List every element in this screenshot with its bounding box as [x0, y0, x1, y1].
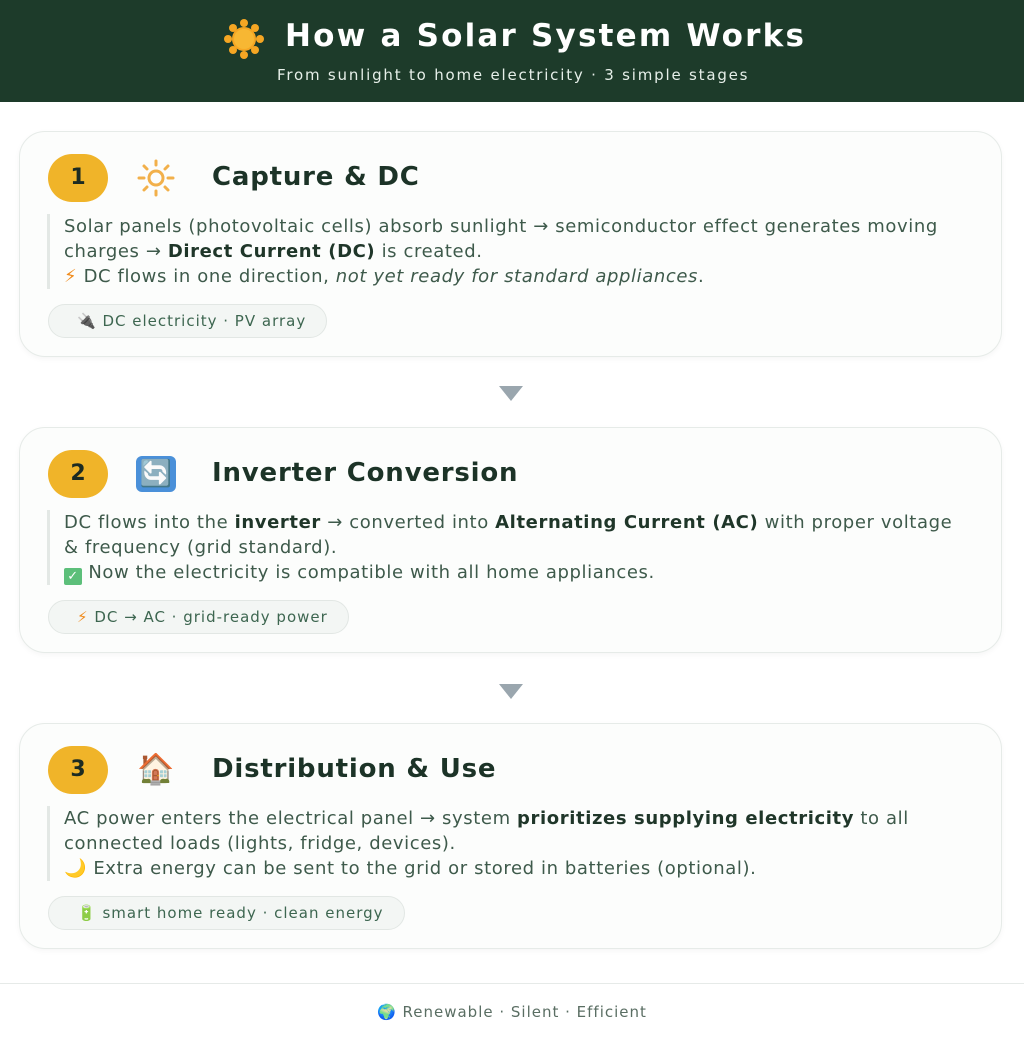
heading 3: Distribution & Use [212, 754, 496, 784]
icon: sun [138, 160, 174, 196]
text block 3: AC power enters the electrical panel → system prioritizes supplying electricity to all connected loads (lights, fridge, devices). [64, 808, 909, 854]
footer [0, 983, 1024, 1024]
icon: convert: 🔄 [140, 459, 172, 489]
icon: header sun [224, 19, 264, 59]
text block 3: 🌙 Extra energy can be sent to the grid or stored in batteries (optional). [64, 858, 756, 879]
tag 1: 🔌 DC electricity · PV array [77, 312, 306, 330]
header [0, 0, 1024, 102]
text block 3 [47, 806, 965, 881]
text block 2: DC flows into the inverter → converted into Alternating Current (AC) with proper voltage & frequency (grid standard). [64, 512, 952, 558]
footer: 🌍 Renewable · Silent · Efficient [377, 1003, 647, 1021]
title: How a Solar System Works [285, 18, 806, 54]
text block 2: ✓ [67, 569, 79, 584]
badge 3 [48, 746, 108, 794]
tag 3 [48, 896, 405, 930]
panel: stage 1 [19, 131, 1002, 357]
badge 2 [48, 450, 108, 498]
tag 3: 🔋 smart home ready · clean energy [77, 904, 384, 922]
text block 1 [47, 214, 965, 289]
arrow 1 [499, 386, 523, 401]
tag 2 [48, 600, 349, 634]
subtitle: From sunlight to home electricity · 3 simple stages [277, 66, 749, 84]
badge 1: 1 [70, 165, 86, 190]
arrow 2 [499, 684, 523, 699]
badge 3: 3 [70, 757, 86, 782]
panel: stage 3 [19, 723, 1002, 949]
badge 2: 2 [70, 461, 86, 486]
icon: house: 🏠 [137, 752, 175, 787]
heading 2: Inverter Conversion [212, 458, 518, 488]
panel: stage 2 [19, 427, 1002, 653]
tag 1 [48, 304, 327, 338]
text block 2 [47, 510, 965, 585]
tag 2: ⚡ DC → AC · grid-ready power [77, 608, 328, 626]
badge 1 [48, 154, 108, 202]
text block 1: Solar panels (photovoltaic cells) absorb sunlight → semiconductor effect generates moving charges → Direct Current (DC) is created. [64, 216, 938, 262]
text block 2: Now the electricity is compatible with all home appliances. [88, 562, 655, 583]
heading 1: Capture & DC [212, 162, 420, 192]
text block 1: ⚡ DC flows in one direction, not yet ready for standard appliances. [64, 266, 704, 287]
